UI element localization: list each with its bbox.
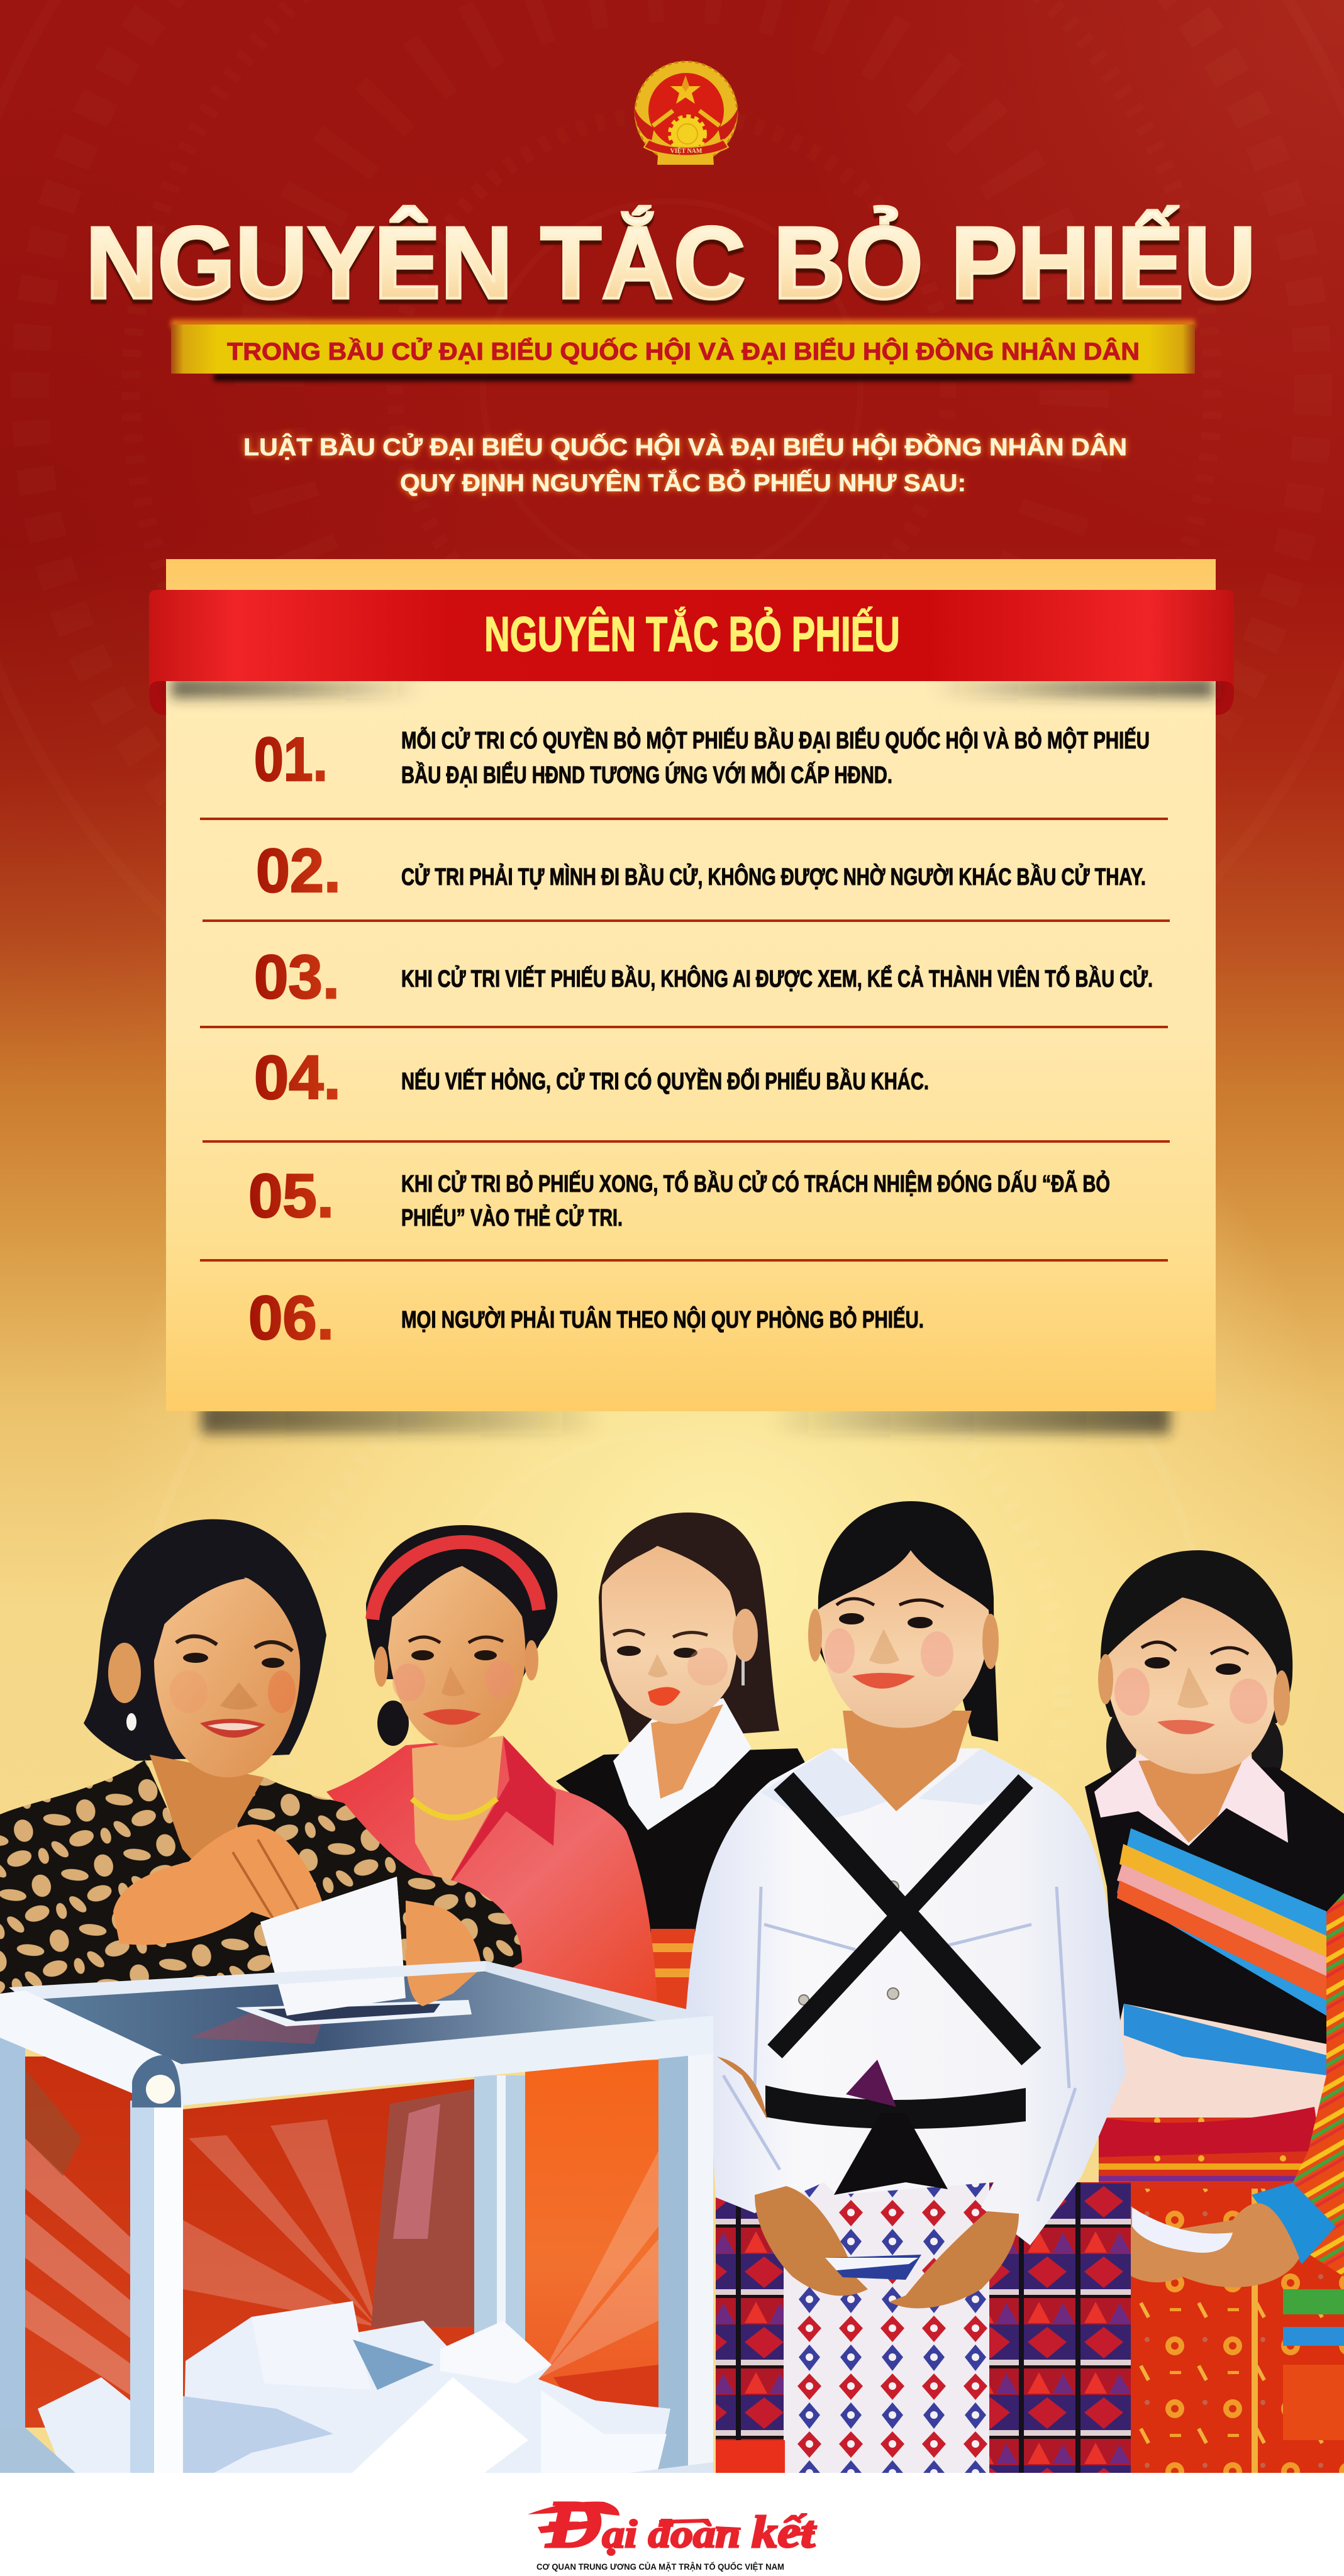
card body <box>166 559 1216 1411</box>
intro text: QUY ĐỊNH NGUYÊN TẮC BỎ PHIẾU NHƯ SAU: <box>400 469 966 497</box>
item 06 <box>248 1283 924 1352</box>
frame <box>9 1961 494 2000</box>
item 05: KHI CỬ TRI BỎ PHIẾU XONG, TỔ BẦU CỬ CÓ TRÁCH NHIỆM ĐÓNG DẤU “ĐÃ BỎ <box>401 1169 1110 1197</box>
straps <box>784 1781 1031 2057</box>
panels <box>25 2057 132 2428</box>
subtitle ribbon: TRONG BẦU CỬ ĐẠI BIỂU QUỐC HỘI VÀ ĐẠI BIỂU HỘI ĐỒNG NHÂN DÂN <box>227 337 1140 365</box>
top glass <box>25 1972 686 2064</box>
ballots <box>38 2301 670 2473</box>
ballot <box>260 1877 406 2016</box>
item 01: 01. <box>254 724 328 794</box>
item 05: PHIẾU” VÀO THẺ CỬ TRI. <box>401 1204 623 1231</box>
item 02 <box>256 836 1146 905</box>
woman 5: striped sash <box>1085 1550 1344 2473</box>
intro text <box>243 433 1127 497</box>
icon: national emblem <box>635 61 738 165</box>
ribbon header <box>149 590 1234 715</box>
woman 4: white shirt with black straps <box>684 1501 1131 2473</box>
item 05: 05. <box>248 1161 334 1230</box>
title: NGUYÊN TẮC BỎ PHIẾU <box>86 205 1256 320</box>
heading: NGUYÊN TẮC BỎ PHIẾU <box>484 606 900 662</box>
headband <box>372 1542 539 1619</box>
item 06: 06. <box>248 1283 334 1352</box>
item 01: MỖI CỬ TRI CÓ QUYỀN BỎ MỘT PHIẾU BẦU ĐẠI BIỂU QUỐC HỘI VÀ BỎ MỘT PHIẾU <box>401 726 1150 754</box>
dividers <box>200 818 1170 1262</box>
item 01: BẦU ĐẠI BIỂU HĐND TƯƠNG ỨNG VỚI MỖI CẤP HĐND. <box>401 760 892 789</box>
shirt <box>684 1748 1126 2245</box>
item 04: 04. <box>254 1043 341 1112</box>
item 05 <box>248 1161 1110 1231</box>
item 04 <box>254 1043 929 1112</box>
skirt <box>1099 2118 1316 2189</box>
logo: Dai Doan Ket: Đại đoàn kết <box>545 2487 816 2562</box>
illustration: voters and ballot box <box>0 1501 1344 2473</box>
panel: principles card <box>149 559 1234 1434</box>
woman 3: black vest <box>556 1513 818 2023</box>
hands <box>113 1824 326 1945</box>
footer <box>0 2473 1344 2576</box>
belt <box>765 2085 1026 2129</box>
hands <box>755 2186 1019 2308</box>
item 06: MỌI NGƯỜI PHẢI TUÂN THEO NỘI QUY PHÒNG BỎ PHIẾU. <box>401 1305 924 1333</box>
item 01 <box>254 724 1150 794</box>
item 02: 02. <box>256 836 341 905</box>
woman 1: black floral shirt <box>0 1519 522 2016</box>
subtitle ribbon <box>171 319 1195 381</box>
item 04: NẾU VIẾT HỎNG, CỬ TRI CÓ QUYỀN ĐỔI PHIẾU BẦU KHÁC. <box>401 1067 929 1095</box>
skirt <box>716 2182 1131 2473</box>
posts <box>0 2038 25 2472</box>
woman 2: red blouse <box>326 1525 657 2038</box>
item 03 <box>254 942 1153 1011</box>
card shadow <box>201 1401 1170 1434</box>
item 03: 03. <box>254 942 340 1011</box>
logo tagline: CƠ QUAN TRUNG ƯƠNG CỦA MẶT TRẬN TỔ QUỐC VIỆT NAM <box>536 2561 784 2572</box>
intro text: LUẬT BẦU CỬ ĐẠI BIỂU QUỐC HỘI VÀ ĐẠI BIỂU HỘI ĐỒNG NHÂN DÂN <box>243 433 1127 461</box>
hands and ballot <box>1099 2193 1299 2287</box>
ballot box <box>0 1877 713 2473</box>
icon: national emblem: VIỆT NAM <box>670 147 703 155</box>
shirt folds, pockets and buttons <box>723 1887 1075 2201</box>
